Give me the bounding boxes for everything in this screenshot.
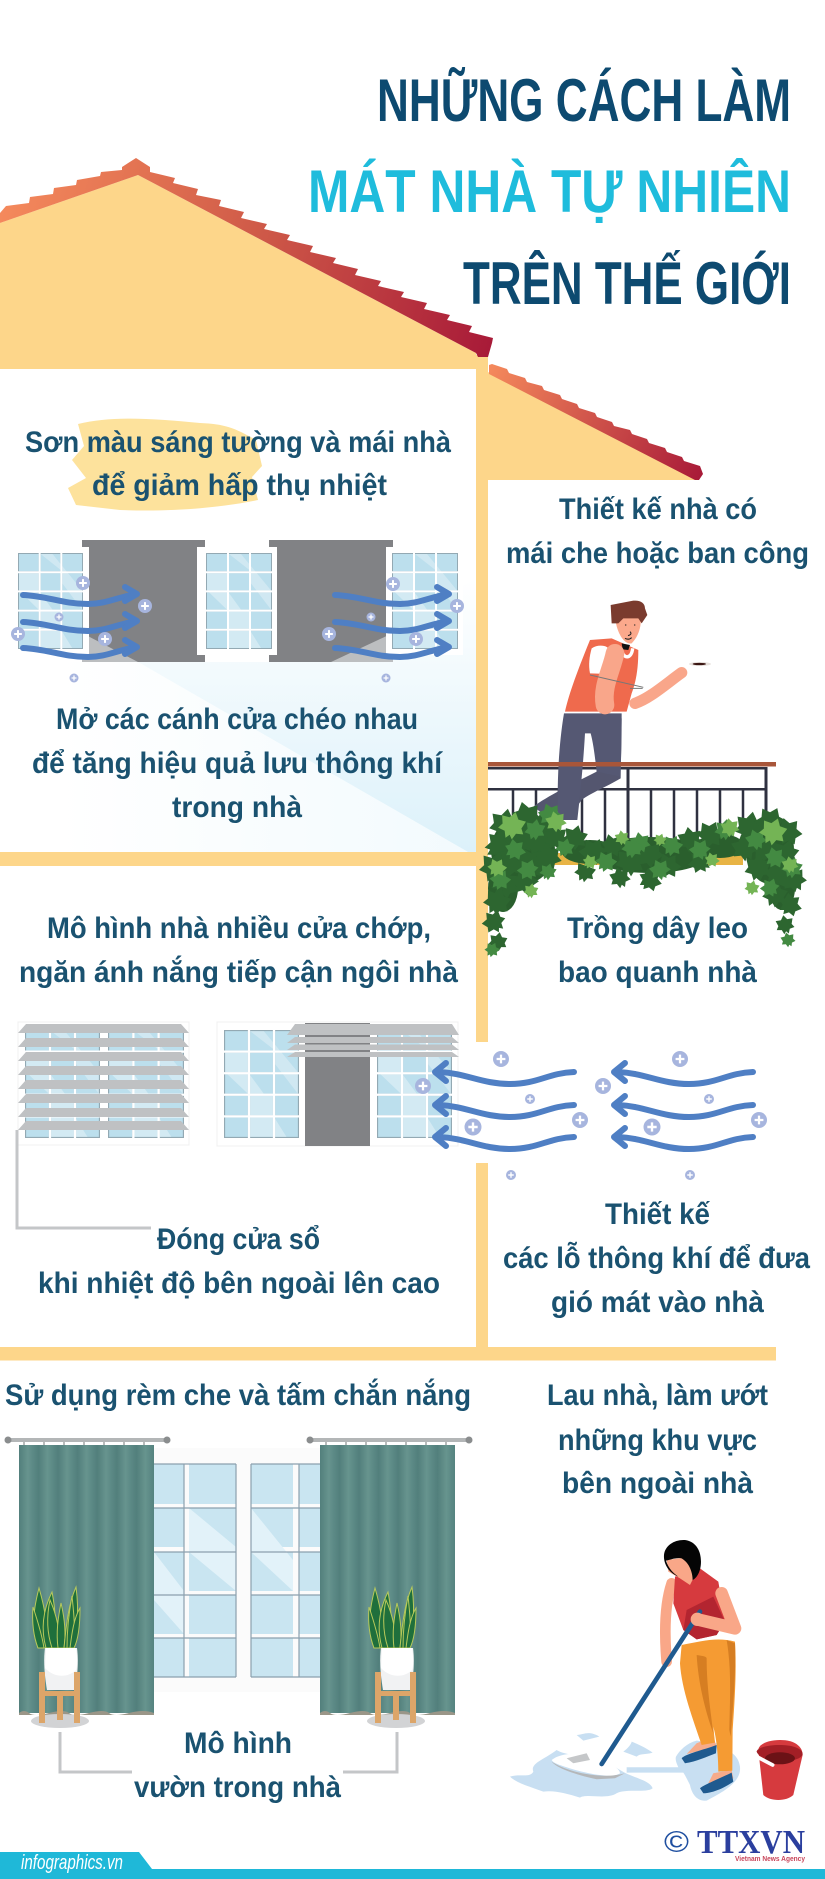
text: cross ventilation: Mở các cánh cửa chéo nhau xyxy=(56,703,418,736)
text: shutters: ngăn ánh nắng tiếp cận ngôi nhà xyxy=(19,955,458,989)
heading: light paint: để giảm hấp thụ nhiệt xyxy=(92,469,387,502)
text: indoor garden: vườn trong nhà xyxy=(134,1771,341,1804)
text: shutters: Mô hình nhà nhiều cửa chớp, xyxy=(47,912,431,945)
shuttered window: right xyxy=(217,1022,459,1146)
logo: TTXVN: © xyxy=(664,1826,689,1859)
roof tiles: main roof xyxy=(0,158,493,357)
illustration: ivy vines xyxy=(477,796,809,959)
illustration: curtains xyxy=(4,1436,472,1715)
logo: TTXVN xyxy=(664,1824,805,1863)
house wall and roof fill xyxy=(0,175,776,1360)
text: cross ventilation: để tăng hiệu quả lưu thông khí xyxy=(32,747,444,780)
text: vents xyxy=(503,1198,810,1319)
balcony handrail xyxy=(488,762,776,766)
air flow arrows: vents xyxy=(415,1051,767,1180)
shuttered window: left xyxy=(18,1022,189,1145)
text: vents: Thiết kế xyxy=(605,1198,710,1231)
heading: light paint: Sơn màu sáng tường và mái nhà xyxy=(25,426,451,459)
illustration: potted plants xyxy=(31,1587,425,1728)
illustration: woman mopping xyxy=(510,1540,803,1801)
text: climbing plants: Trồng dây leo xyxy=(567,912,748,945)
text: wet floor heading: những khu vực xyxy=(558,1424,757,1457)
text: close windows: khi nhiệt độ bên ngoài lên cao xyxy=(38,1267,440,1300)
text: close windows: Đóng cửa sổ xyxy=(157,1223,320,1256)
text: shutters xyxy=(19,912,458,989)
text: vents: gió mát vào nhà xyxy=(551,1286,764,1319)
air flow arrows: cross ventilation xyxy=(11,576,464,682)
heading: balcony xyxy=(506,493,809,570)
heading: balcony: Thiết kế nhà có xyxy=(559,493,757,526)
bracket: indoor garden xyxy=(60,1732,397,1772)
heading: light paint xyxy=(25,426,451,502)
illustration: balcony railing xyxy=(488,767,766,865)
text: climbing plants: bao quanh nhà xyxy=(558,956,757,989)
title xyxy=(308,67,791,317)
footer bar: infographics.vn xyxy=(21,1852,123,1874)
illustration: man on balcony xyxy=(533,601,711,820)
text: cross ventilation: trong nhà xyxy=(172,791,302,824)
light beam background xyxy=(60,578,476,852)
text: wet floor heading xyxy=(547,1379,768,1500)
text: close windows xyxy=(38,1223,440,1300)
text: cross ventilation xyxy=(32,703,444,824)
bracket: shutters to closed window note xyxy=(17,1130,151,1228)
text: curtains heading: Sử dụng rèm che và tấm chắn nắng xyxy=(5,1378,471,1412)
logo: TTXVN: Vietnam News Agency xyxy=(735,1856,805,1863)
text: wet floor heading: bên ngoài nhà xyxy=(562,1467,753,1500)
logo: TTXVN: TTXVN xyxy=(697,1824,805,1861)
cross ventilation windows xyxy=(13,540,463,662)
text: indoor garden xyxy=(134,1727,341,1804)
paint brush highlight xyxy=(68,419,262,511)
text: wet floor heading: Lau nhà, làm ướt xyxy=(547,1379,768,1412)
roof tiles: lower roof xyxy=(489,364,703,480)
footer bar xyxy=(0,1852,825,1879)
text: climbing plants xyxy=(558,912,757,989)
illustration: window behind curtains xyxy=(150,1448,325,1692)
text: indoor garden: Mô hình xyxy=(184,1727,292,1760)
